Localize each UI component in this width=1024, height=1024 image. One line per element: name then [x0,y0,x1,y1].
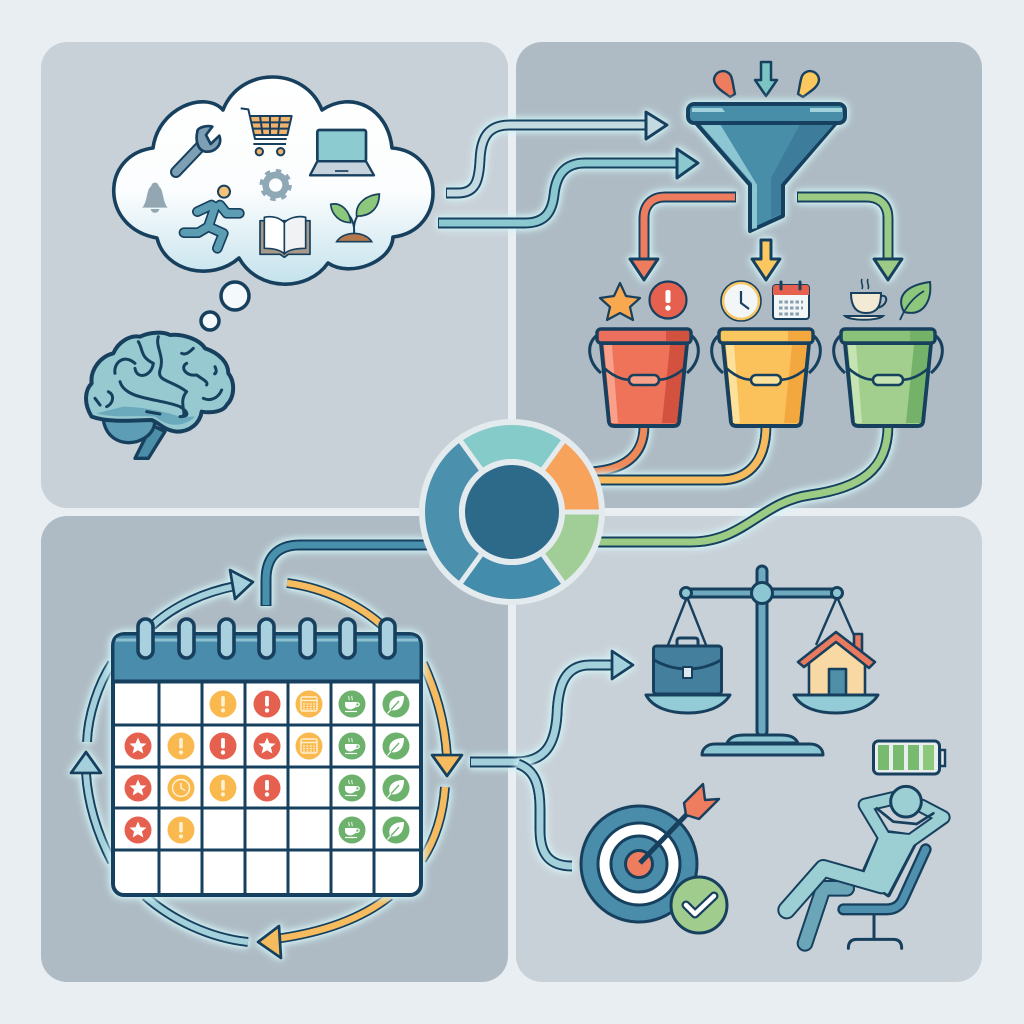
cycle arrow: top left blue [152,570,253,626]
chair [843,849,926,948]
calendar [113,619,421,895]
icon: bell [142,183,168,213]
briefcase [654,638,722,694]
icon: battery [874,741,945,774]
icon: wrench [176,126,220,172]
tube: hub to calendar [266,545,435,606]
icon: funnel [688,104,845,231]
funnel inputs [714,62,819,97]
icon: open book [260,217,310,257]
ring segment: green [543,512,599,582]
tube: calendar to balance scale [470,651,633,762]
calendar row 4 icons [124,816,410,844]
icon: gear [262,171,290,199]
tube: red bucket to hub [590,425,644,472]
panel: bottom right background [516,516,982,982]
right scale pan [794,695,878,713]
bucket: green [834,329,942,426]
arrow in target [640,784,719,863]
cycle arrow: lower right yellow [422,787,445,860]
icon: running figure [184,186,239,248]
icon: relaxing person in chair [787,786,943,948]
calendar card [113,634,421,895]
target rings [581,806,697,922]
ring segment: orange [543,442,599,512]
cycle arrow: bottom blue [145,896,248,942]
scale post and beam [680,566,842,755]
panel: bottom left background [41,516,508,982]
icon: laptop [310,130,374,175]
cycle arrow: top right yellow [287,583,385,628]
left scale pan [646,695,730,713]
icon: tea cup [845,279,886,320]
bucket: red [590,329,698,426]
icons inside the cloud [142,108,379,257]
thought bubbles [201,282,249,330]
body and front leg [787,798,943,910]
ring segment: top teal [461,425,563,469]
central hub ring [419,419,605,605]
icon: shopping cart [241,108,292,155]
panel: top right background [516,42,982,508]
ring segment: left blue [425,442,481,582]
icon: balance scale [646,566,878,755]
icon: clock [721,281,761,321]
cycle arrow: lower left blue [71,752,112,862]
icon: sprout [331,194,379,242]
check badge [671,877,727,933]
head [891,786,921,817]
arrow: funnel to red bucket [630,197,736,280]
icon: brain [86,333,233,458]
calendar row 1 icons [210,690,410,718]
thought cloud with task icons [114,77,433,284]
icon: star [600,283,640,320]
tube: calendar to target [518,764,572,866]
cycle arrows around calendar [71,570,462,958]
icon: alert [650,282,686,318]
ring segment: bottom blue [461,555,563,599]
calendar row 2 icons [124,732,410,760]
arrow: funnel to yellow bucket [752,240,780,280]
back leg [805,888,847,943]
cloud outline [114,77,433,284]
hub core [465,465,559,559]
icons above green bucket [845,279,930,320]
icon: yellow bulb [798,71,819,97]
calendar row 3 icons [124,774,410,802]
arrow: lower tube to funnel [438,149,698,223]
cycle arrow: right yellow [423,663,462,776]
icon: leaf [900,282,930,320]
icon: calendar [773,282,809,319]
cycle arrow: upper left blue [87,663,112,742]
calendar binder rings [138,619,395,658]
arrow: upper tube to funnel [446,112,667,193]
arrow: funnel to green bucket [797,197,902,280]
icon: target with arrow and check [581,784,727,933]
scale chains [668,597,856,645]
icons above red bucket [600,282,686,320]
calendar grid [113,682,421,893]
tube: yellow bucket to hub [595,425,766,480]
icon: red bulb [714,71,735,97]
cycle arrow: bottom yellow [258,896,390,958]
house [798,632,875,695]
bucket: yellow [712,329,820,426]
tube: green bucket to hub [595,425,888,542]
panel: top left background [41,42,508,508]
arrow: teal down [755,62,777,96]
icons above yellow bucket [721,281,809,321]
